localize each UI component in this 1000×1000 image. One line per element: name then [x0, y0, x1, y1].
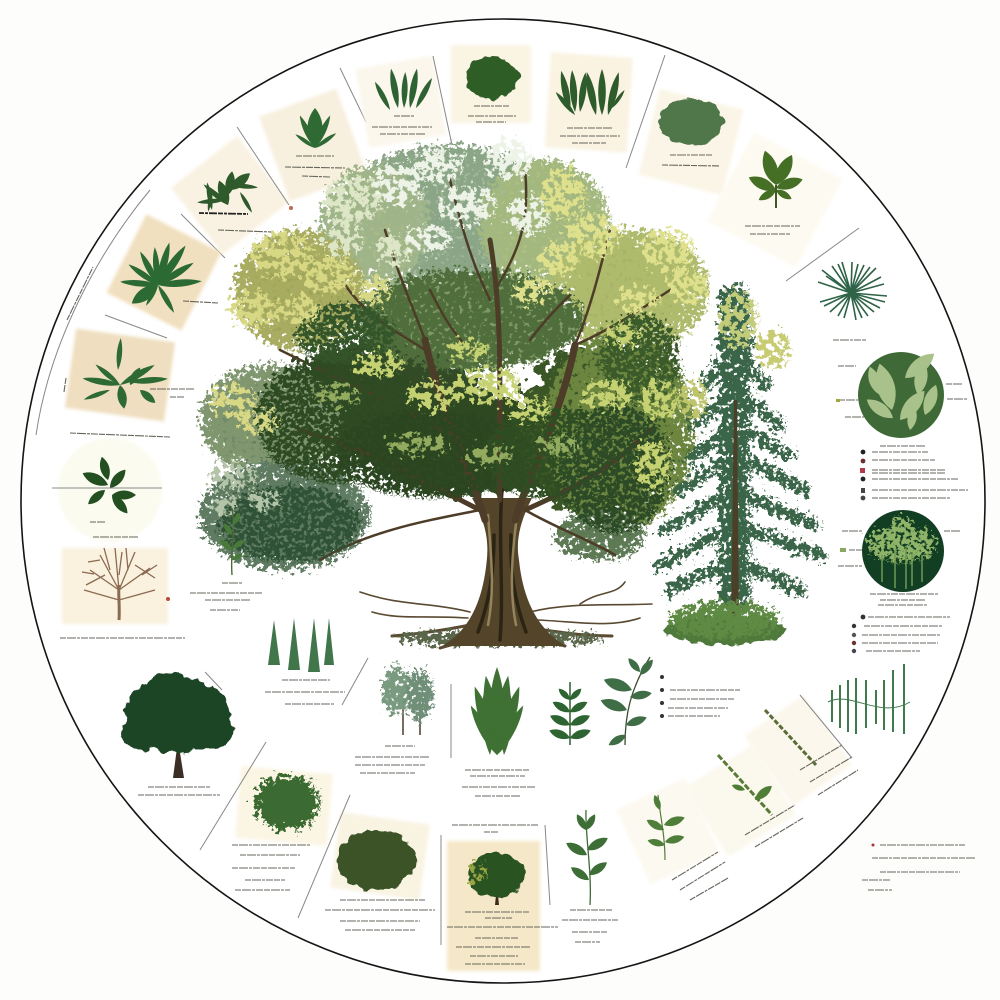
- panel: small tree card: [200, 742, 333, 890]
- panel: fern card upper left: [171, 127, 293, 258]
- trunk and branches: [280, 170, 670, 646]
- panel: round bush card: [451, 45, 531, 123]
- panel: leafy stem disc: [52, 438, 162, 542]
- panel: fern on sand card (strong beige): [36, 190, 194, 437]
- highlight foliage clumps: [211, 140, 710, 515]
- panel: leaf cluster medallion: [836, 348, 968, 438]
- text block: list under leaf medallion: [860, 446, 968, 500]
- plant: saplings pair: [355, 666, 433, 773]
- panel: tall stems card: [356, 56, 452, 148]
- panel: dense shrub card: [298, 795, 435, 930]
- panel: grass card: [259, 68, 367, 201]
- panel: sprig card 2: [685, 745, 803, 857]
- panel: sprig card 1: [744, 695, 858, 806]
- ground grass: [395, 630, 605, 646]
- panel: bare tree card: [60, 548, 185, 638]
- panel: featured tree card: [441, 825, 558, 971]
- text block: lower right note: [862, 844, 975, 890]
- panel: hedge bar chart sketch: [828, 664, 910, 734]
- plant: fern frond: [548, 682, 592, 745]
- text block: list under forest medallion: [852, 615, 950, 653]
- plant: grass tuft column: [451, 667, 535, 796]
- roots: [360, 582, 652, 648]
- panel: forest medallion: [838, 510, 960, 605]
- plant: leafy branch: [599, 656, 740, 748]
- panel: herb card: [616, 778, 728, 900]
- panel: spiky plant card (strong beige): [105, 214, 221, 338]
- icon: spiky grass burst: [818, 262, 887, 340]
- back foliage: [200, 145, 710, 570]
- panel: twin plant card: [545, 52, 665, 168]
- plant: small sapling: [190, 508, 262, 610]
- fir tree: [660, 292, 820, 645]
- plant: conifer row: [265, 618, 368, 705]
- mid foliage: [220, 305, 680, 563]
- panel: broadleaf plant card: [707, 132, 859, 281]
- panel: pale shrub card: [639, 89, 768, 222]
- main tree: [200, 140, 710, 648]
- solid canopy underlay: [213, 157, 694, 560]
- text block: left arc note: [64, 267, 93, 392]
- plant: large dark oak: [121, 672, 234, 795]
- plant: tall herb: [545, 810, 618, 942]
